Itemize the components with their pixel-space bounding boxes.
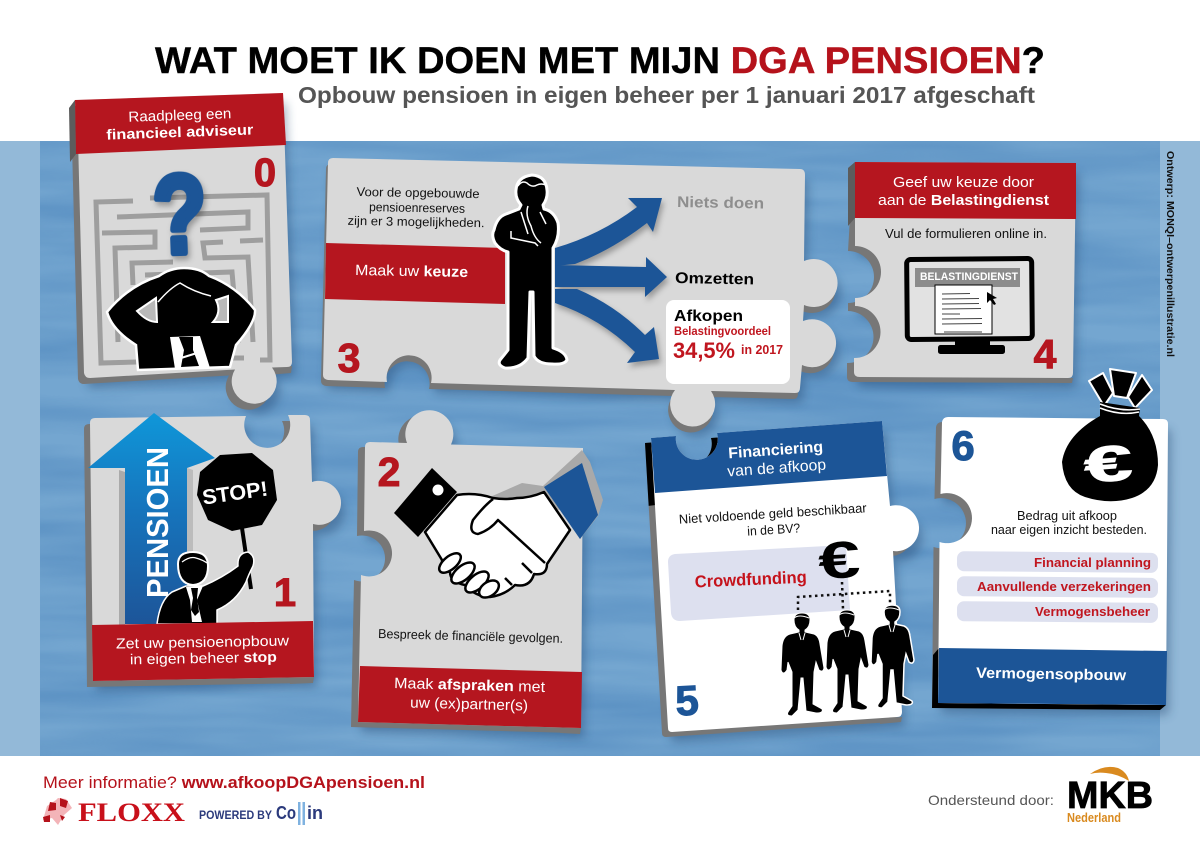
icon: pensioen arrow [88, 413, 215, 628]
text: three possibilities: zijn er 3 mogelijkheden. [347, 214, 485, 230]
panel: step 6 vermogensopbouw [932, 369, 1171, 715]
background: water band [0, 141, 1200, 756]
text: three possibilities: Voor de opgebouwde [356, 185, 480, 201]
red heading band [92, 621, 314, 681]
icon: euro symbol: € [817, 531, 862, 591]
panel: step 3 maak uw keuze [321, 158, 841, 436]
text: bedrag uit afkoop [991, 509, 1147, 537]
icon: pensioen arrow: PENSIOEN [140, 447, 175, 598]
callout: crowdfunding: Crowdfunding [694, 568, 807, 591]
blue heading band: Vermogensopbouw [976, 665, 1127, 684]
list: aanvullende verzekeringen [957, 576, 1158, 598]
icon: stop sign [197, 453, 277, 589]
list: aanvullende verzekeringen: Aanvullende verzekeringen [977, 580, 1151, 594]
subtitle: Opbouw pensioen in eigen beheer per 1 januari 2017 afgeschaft [298, 82, 1035, 108]
text: niet voldoende geld [678, 500, 868, 539]
red heading band: Raadpleeg een [128, 106, 232, 126]
panel: step 0 financieel adviseur [69, 93, 295, 414]
step number 4: 4 [1034, 331, 1057, 377]
credit: vertical design text: Ontwerp: MONQI–ontwerpenillustratie.nl [1164, 151, 1176, 357]
icon: stop sign: STOP! [201, 478, 269, 510]
step number 6: 6 [951, 422, 975, 469]
blue heading band [938, 648, 1167, 705]
title: WAT MOET IK DOEN MET MIJN DGA PENSIOEN? [155, 40, 1045, 81]
option: omzetten: Omzetten [675, 270, 754, 288]
logo: powered by collin: Co [276, 803, 296, 823]
blue heading band: van de afkoop [727, 457, 827, 480]
text: three possibilities [347, 185, 485, 230]
panel: step 2 afspraken [351, 410, 603, 738]
list: financial planning: Financial planning [1034, 556, 1151, 570]
icon: money bag [1062, 369, 1158, 501]
red heading band [855, 162, 1076, 219]
logo: floxx [43, 798, 185, 827]
list: vermogensbeheer: Vermogensbeheer [1035, 605, 1150, 619]
callout: crowdfunding [668, 545, 850, 621]
callout: afkopen: 34,5% [673, 338, 735, 363]
text: bedrag uit afkoop: Bedrag uit afkoop [1017, 509, 1117, 523]
step number 0: 0 [254, 151, 276, 195]
icon: man holding sign [157, 552, 254, 624]
step number 2: 2 [378, 449, 400, 495]
blue heading band [651, 421, 887, 493]
red heading band: aan de Belastingdienst [878, 193, 1049, 209]
red heading band [358, 666, 582, 728]
icon: handshake [394, 450, 603, 601]
step number 1: 1 [274, 571, 296, 615]
icon: money bag: € [1082, 434, 1134, 494]
red heading band: financieel adviseur [106, 122, 254, 144]
text: three possibilities: pensioenreserves [369, 200, 465, 216]
logo: powered by collin: POWERED BY [199, 808, 272, 822]
red heading band: Geef uw keuze door [893, 175, 1034, 191]
logo: powered by collin: in [307, 803, 323, 823]
panel: step 1 stop pensioenopbouw [84, 413, 344, 691]
footer: meer informatie: Meer informatie? www.afkoopDGApensioen.nl [43, 773, 425, 792]
icon: monitor [907, 258, 1032, 354]
red heading band [75, 93, 286, 154]
logo: floxx: FLOXX [78, 798, 185, 827]
arrows: three options [555, 198, 667, 363]
icon: question mark: ? [151, 151, 209, 278]
icon: thinking man [493, 175, 567, 368]
text: bespreek: Bespreek de financiële gevolgen. [378, 626, 563, 646]
option: niets doen: Niets doen [677, 194, 764, 213]
logo: mkb nederland: MKB [1067, 775, 1153, 817]
callout: afkopen [666, 300, 790, 384]
step number 3: 3 [338, 335, 360, 381]
text: niet voldoende geld: Niet voldoende geld beschikbaar [678, 500, 868, 527]
red heading band [325, 243, 505, 304]
panel: step 5 financiering [645, 421, 922, 742]
icon: dotted connector lines [798, 582, 890, 610]
step number 5: 5 [674, 676, 700, 725]
icon: maze [96, 195, 270, 363]
red heading band: uw (ex)partner(s) [410, 694, 528, 715]
callout: afkopen: in 2017 [741, 343, 783, 357]
text: niet voldoende geld: in de BV? [747, 520, 801, 539]
red heading band: Maak uw keuze [355, 262, 468, 281]
text: formulieren: Vul de formulieren online in. [885, 226, 1047, 241]
callout: afkopen: Belastingvoordeel [674, 324, 771, 338]
logo: mkb nederland: Nederland [1067, 810, 1121, 825]
icon: monitor: BELASTINGDIENST [920, 271, 1018, 283]
red heading band: Zet uw pensioenopbouw [116, 633, 290, 653]
blue heading band: Financiering [728, 439, 824, 462]
panel: step 4 belastingdienst [847, 162, 1079, 388]
icon: man with hands on head [107, 268, 255, 370]
list: financial planning [957, 551, 1158, 573]
text: bedrag uit afkoop: naar eigen inzicht besteden. [991, 523, 1147, 537]
callout: afkopen: Afkopen [674, 308, 743, 325]
logo: powered by collin [199, 802, 323, 825]
icon: three crowdfunders [781, 605, 914, 716]
text: ondersteund door: Ondersteund door: [928, 792, 1054, 808]
red heading band: in eigen beheer stop [130, 650, 277, 668]
red heading band: Maak afspraken met [394, 675, 546, 696]
list: vermogensbeheer [957, 601, 1158, 623]
